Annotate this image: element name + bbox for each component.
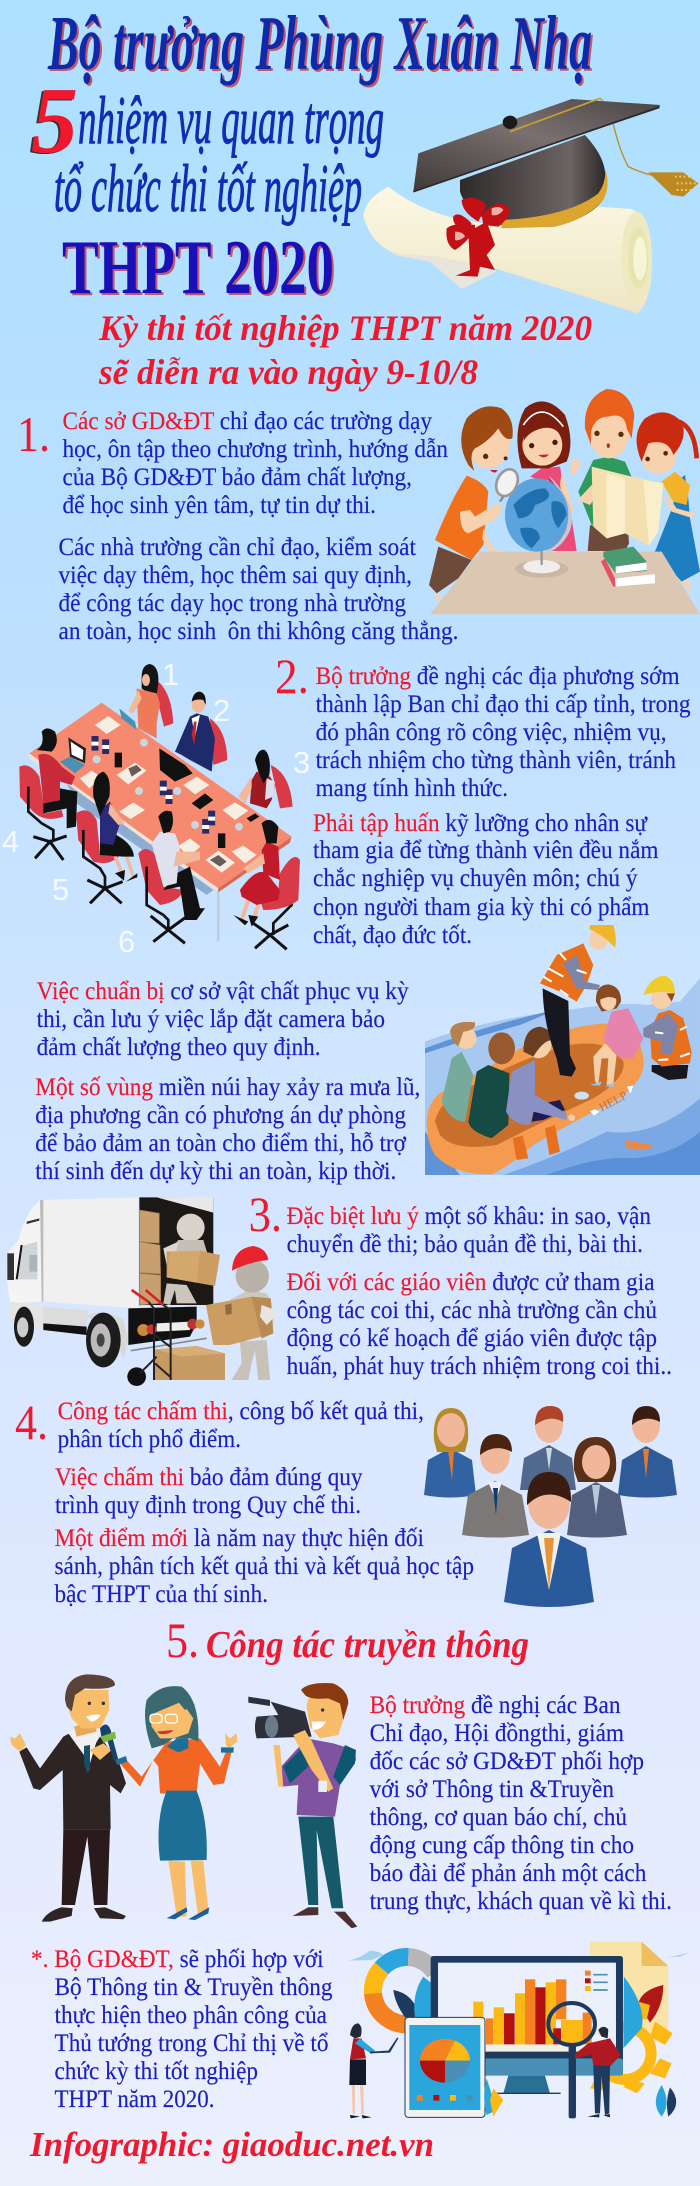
text block: new point: sánh, phân tích kết quả thi và kết quả học tập [54,1551,474,1580]
text block: facilities: thi, cần lưu ý việc lắp đặt camera bảo [37,1004,385,1033]
text block: new point [54,1523,474,1608]
subtitle line 2: tổ chức thi tốt nghiệp [54,150,362,226]
illustration: group of people in suits [424,1406,677,1607]
seat numbers: 4 [2,824,19,859]
text block: facilities: Việc chuẩn bị cơ sở vật chất phục vụ kỳ [37,976,409,1005]
seat numbers: 6 [118,924,135,959]
illustration: reporter interviewing a man and a cameraman [10,1674,357,1928]
seat numbers: 2 [213,693,230,728]
illustration: delivery truck with boxes [7,1197,280,1386]
panel: section 3 [7,1186,672,1386]
text block: marking: phân tích phổ điểm. [58,1424,241,1453]
text block: mountain regions: địa phương cần có phương án dự phòng [35,1100,406,1129]
number 2: 2. [275,648,309,704]
exam date line 1: Kỳ thi tốt nghiệp THPT năm 2020 [98,308,592,348]
text block: training: chọn người tham gia kỳ thi có phẩm [313,892,650,921]
illustration: flood rescue boat: HELP [596,1088,630,1114]
text block: second paragraph: Các nhà trường cần chỉ đạo, kiểm soát [58,532,416,561]
text block: provincial steering board: mang tính hình thức. [316,773,508,802]
text block: second paragraph: an toàn, học sinh ôn thi không căng thẳng. [58,616,458,645]
seat numbers [2,657,310,959]
text block: mountain regions: Một số vùng miền núi hay xảy ra mưa lũ, [35,1072,420,1101]
text block: minister's media request: Chỉ đạo, Hội đồngthi, giám [370,1718,624,1747]
text block: provincial steering board: đó phân công rõ công việc, nhiệm vụ, [316,717,667,746]
text block: first paragraph [62,406,448,519]
icon: graduation cap and diploma [363,98,698,313]
text block: mountain regions: thí sinh đến dự kỳ thi an toàn, kịp thời. [35,1156,396,1185]
text block: marking: Công tác chấm thi, công bố kết quả thi, [58,1396,424,1425]
text block: minister's media request: báo đài để phản ánh một cách [370,1858,647,1887]
text block: invigilating teachers: huấn, phát huy trách nhiệm trong coi thi.. [287,1351,672,1380]
text block: second paragraph: việc dạy thêm, học thêm sai quy định, [58,560,412,589]
subtitle line 1: nhiệm vụ quan trọng [78,82,384,158]
text block: new point: bậc THPT của thí sinh. [54,1579,268,1608]
exam date line 2: sẽ diễn ra vào ngày 9-10/8 [98,352,478,392]
text block: marking regulations: Việc chấm thi bảo đảm đúng quy [55,1462,363,1491]
text block: new point: Một điểm mới là năm nay thực hiện đối [54,1523,424,1552]
panel: facilities and flood safety [35,925,700,1185]
text block: invigilating teachers: công tác coi thi, các nhà trường cần chủ [287,1295,657,1324]
text block: invigilating teachers: Đối với các giáo viên được cử tham gia [287,1267,655,1296]
text block: training: tham gia để từng thành viên đều nắm [313,835,659,864]
panel: section 4 [15,1394,677,1608]
text block: ministry coordination: chức kỳ thi tốt nghiệp [54,2056,258,2085]
text block: marking regulations [55,1462,363,1519]
text block: invigilating teachers [287,1267,672,1380]
text block: ministry coordination: Bộ Thông tin & Truyền thông [54,1972,333,2001]
text block: exam transport: chuyển đề thi; bảo quản đề thi, bài thi. [287,1229,643,1258]
text block: second paragraph: để công tác dạy học trong nhà trường [58,588,406,617]
section heading: Công tác truyền thông [206,1624,529,1666]
heading THPT 2020: THPT 2020 [62,224,334,310]
number 5: 5. [166,1612,199,1668]
panel: section 2 [2,648,691,959]
illustration: meeting table with six numbered seats [19,664,300,949]
text block: ministry coordination [31,1944,333,2113]
text block: ministry coordination: *. Bộ GD&ĐT, sẽ phối hợp với [31,1944,324,1973]
text block: first paragraph: học, ôn tập theo chương trình, hướng dẫn [62,434,448,463]
text block: minister's media request: với sở Thông tin &Truyền [370,1774,614,1803]
text block: training: Phải tập huấn kỹ lưỡng cho nhân sự [313,808,648,837]
seat numbers: 3 [293,745,310,780]
illustration: flood rescue boat [425,925,700,1175]
text block: provincial steering board: Bộ trưởng đề nghị các địa phương sớm [316,661,680,690]
text block: ministry coordination: thực hiện theo phân công của [54,2000,327,2029]
big number 5: 5 [31,69,78,173]
text block: first paragraph: của Bộ GD&ĐT bảo đảm chất lượng, [62,462,412,491]
text block: facilities [37,976,409,1061]
number 1: 1. [17,406,50,462]
panel: section 1 [17,389,700,645]
text block: provincial steering board [316,661,691,802]
text block: training: chắc nghiệp vụ chuyên môn; chú ý [313,863,638,892]
text block: invigilating teachers: động có kế hoạch để giáo viên được tập [287,1323,657,1352]
text block: exam transport: Đặc biệt lưu ý một số khâu: in sao, vận [287,1201,651,1230]
text block: minister's media request: Bộ trưởng đề nghị các Ban [370,1690,621,1719]
text block: minister's media request: trung thực, khách quan về kì thi. [370,1886,672,1915]
seat numbers: 5 [52,872,69,907]
text block: minister's media request: thông, cơ quan báo chí, chủ [370,1802,627,1831]
text block: ministry coordination: Thủ tướng trong Chỉ thị về tổ [54,2028,328,2057]
text block: provincial steering board: trách nhiệm cho từng thành viên, tránh [316,745,676,774]
text block: minister's media request: đốc các sở GD&ĐT phối hợp [370,1746,644,1775]
text block: mountain regions [35,1072,420,1185]
text block: minister's media request: động cung cấp thông tin cho [370,1830,634,1859]
seat numbers: 1 [162,657,179,692]
illustration: data dashboard [348,1942,690,2118]
illustration: children with globe [429,389,700,614]
text block: marking regulations: trình quy định trong Quy chế thi. [55,1490,361,1519]
text block: second paragraph [58,532,458,645]
panel: header [31,0,698,392]
panel: section 5 [10,1612,690,2118]
text block: training: chất, đạo đức tốt. [313,920,472,949]
text block: mountain regions: để bảo đảm an toàn cho điểm thi, hỗ trợ [35,1128,406,1157]
text block: marking [58,1396,424,1453]
number 4: 4. [15,1394,48,1450]
footer credit: Infographic: giaoduc.net.vn [29,2125,434,2164]
text block: first paragraph: Các sở GD&ĐT chỉ đạo các trường dạy [62,406,432,435]
text block: first paragraph: để học sinh yên tâm, tự tin dự thi. [62,490,376,519]
text block: training [313,808,659,949]
text block: ministry coordination: THPT năm 2020. [54,2084,214,2113]
text block: facilities: đảm chất lượng theo quy định. [37,1032,321,1061]
number 3: 3. [249,1186,282,1242]
text block: exam transport [287,1201,651,1258]
text block: minister's media request [370,1690,672,1915]
